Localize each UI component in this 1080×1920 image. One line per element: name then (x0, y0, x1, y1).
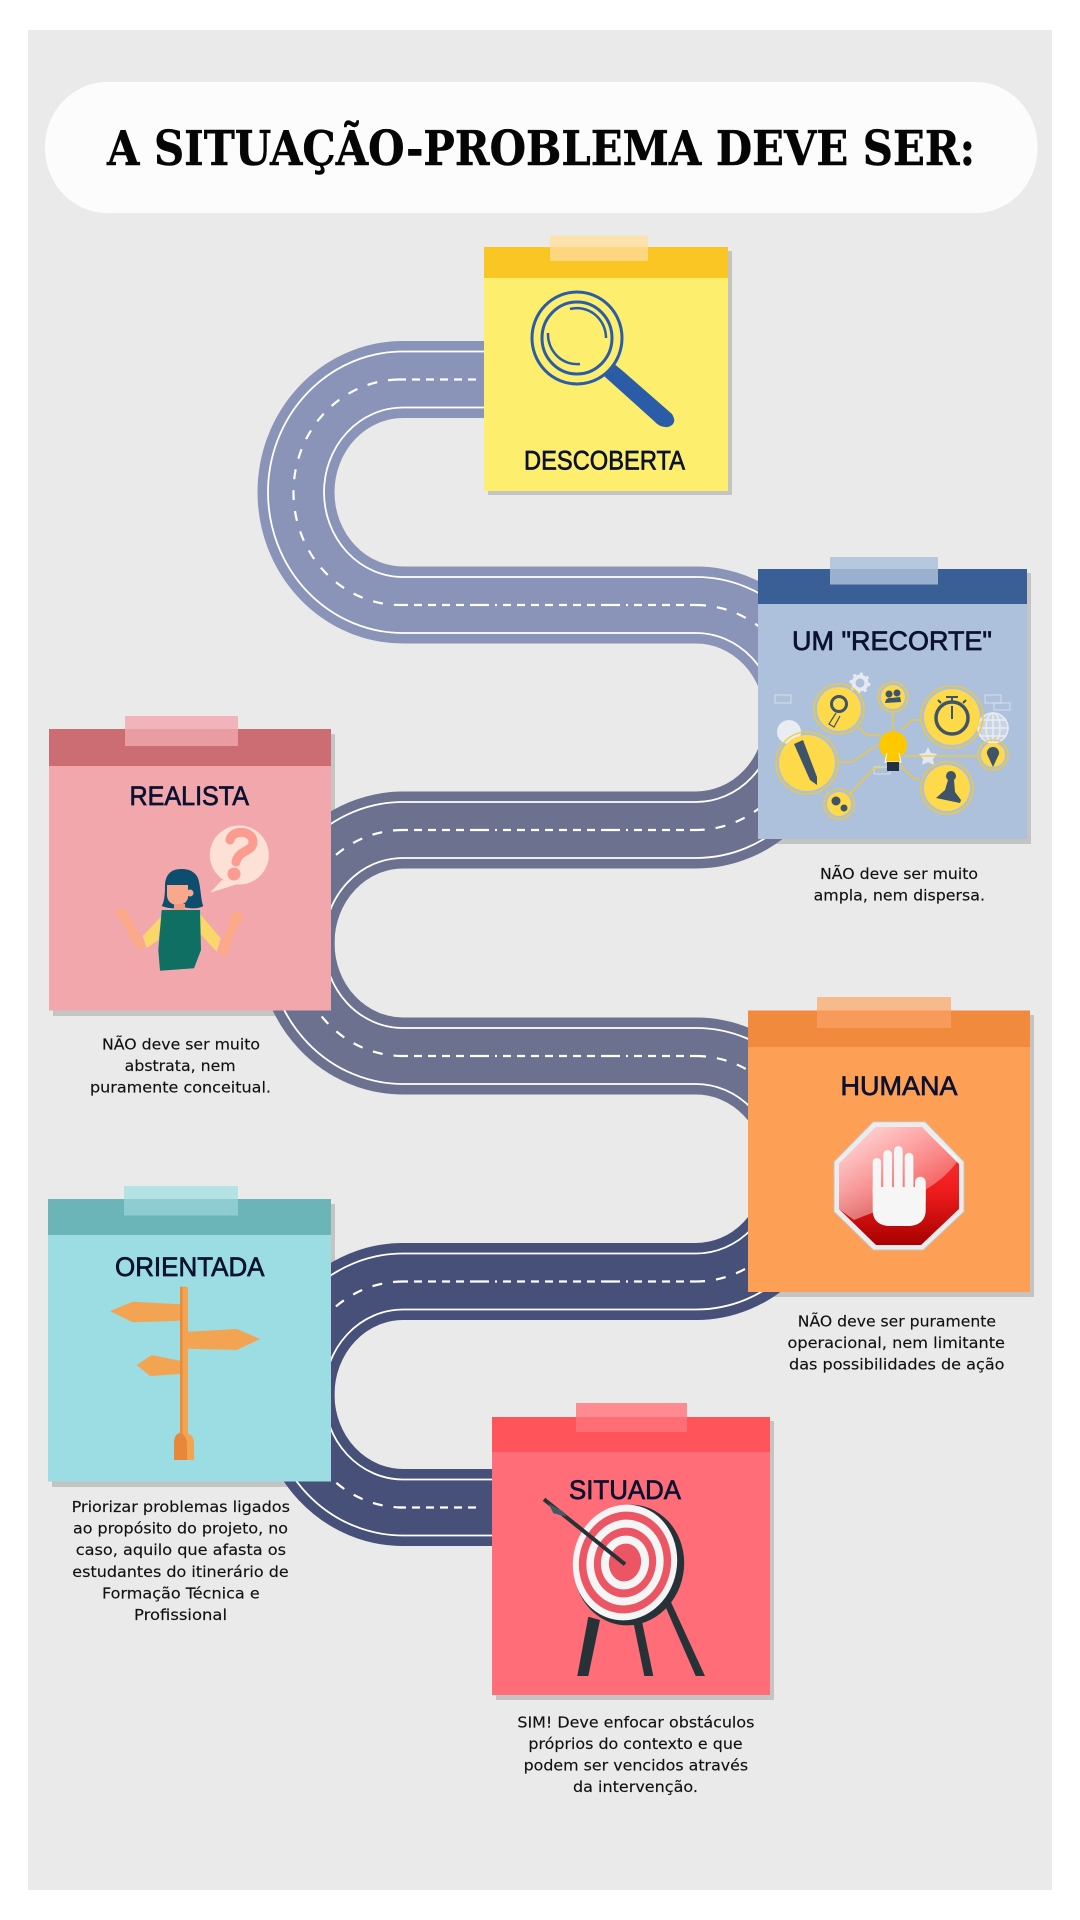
winding road (268, 352, 831, 1536)
text: realista note: NÃO deve ser muito (102, 1034, 260, 1053)
text: humana note: operacional, nem limitante (788, 1334, 1005, 1352)
text: situada note: próprios do contexto e que (528, 1735, 743, 1753)
text: orientada note (72, 1498, 290, 1624)
panel: situada (492, 1403, 770, 1695)
text: situada note (517, 1713, 754, 1796)
title: A SITUAÇÃO-PROBLEMA DEVE SER: (106, 119, 975, 177)
text: orientada note: ao propósito do projeto, no (73, 1520, 288, 1538)
text: recorte note: ampla, nem dispersa. (814, 887, 985, 905)
text: situada note: SIM! Deve enfocar obstáculos (517, 1713, 754, 1731)
icon: target with arrow (544, 1496, 705, 1676)
text: orientada note: Profissional (134, 1606, 227, 1624)
title (45, 82, 1038, 213)
panel: realista (49, 716, 331, 1010)
label: um recorte: UM "RECORTE" (792, 626, 992, 656)
text: humana note (788, 1312, 1005, 1374)
panel: orientada (48, 1186, 331, 1482)
label: realista: REALISTA (130, 781, 249, 811)
panel: um recorte (758, 557, 1027, 839)
text: recorte note (814, 864, 985, 905)
text: situada note: da intervenção. (573, 1778, 698, 1796)
text: recorte note: NÃO deve ser muito (820, 864, 978, 883)
label: humana: HUMANA (840, 1071, 958, 1101)
icon: person with question (116, 826, 269, 971)
text: orientada note: Priorizar problemas ligados (72, 1498, 290, 1516)
text: humana note: das possibilidades de ação (789, 1356, 1004, 1374)
card shadows (52, 251, 1034, 1700)
label: descoberta: DESCOBERTA (524, 446, 685, 476)
text: realista note: puramente conceitual. (90, 1079, 271, 1097)
text: realista note (90, 1034, 271, 1097)
text: realista note: abstrata, nem (125, 1057, 236, 1075)
text: situada note: podem ser vencidos através (524, 1757, 748, 1775)
text: orientada note: estudantes do itinerário de (72, 1563, 289, 1581)
text: humana note: NÃO deve ser puramente (798, 1312, 996, 1330)
text: orientada note: caso, aquilo que afasta os (76, 1541, 286, 1559)
icon: signpost (110, 1287, 260, 1460)
panel: descoberta (484, 236, 728, 491)
icon: magnifying glass (532, 292, 674, 427)
text: orientada note: Formação Técnica e (102, 1584, 260, 1602)
panel: humana (748, 997, 1030, 1292)
icon: stop hand (834, 1122, 964, 1250)
label: situada: SITUADA (569, 1475, 681, 1505)
icon: idea network (775, 674, 1010, 819)
label: orientada: ORIENTADA (115, 1252, 264, 1282)
